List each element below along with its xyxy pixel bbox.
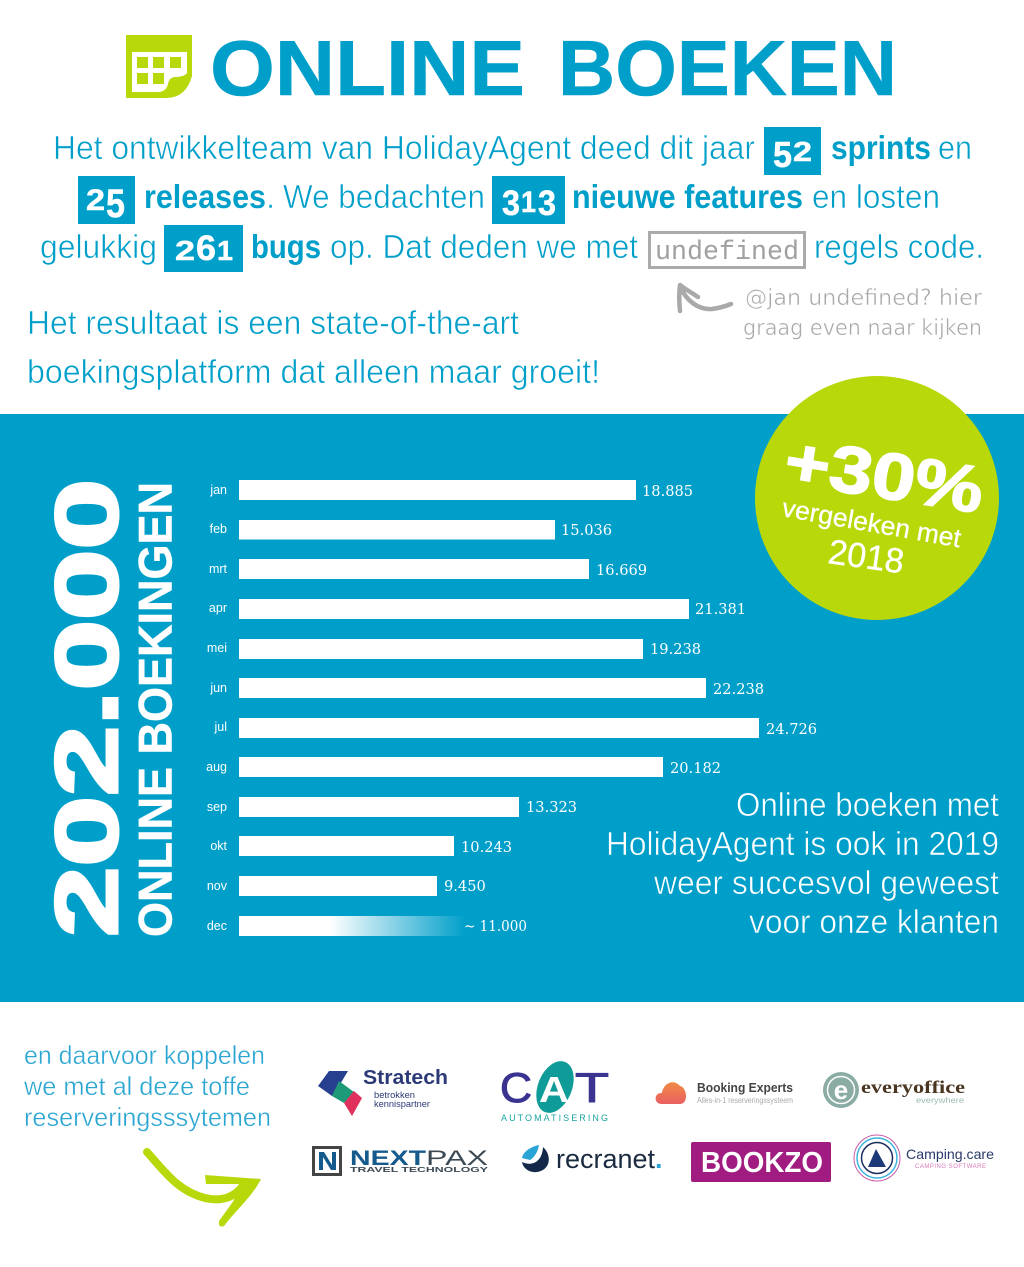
paragraph text line 2: We bedachten [283, 178, 485, 215]
month apr: 21.381 [695, 601, 746, 618]
logo: CAT Automatisering [500, 1056, 609, 1123]
paragraph text line 3: gelukkig [40, 228, 157, 265]
heading [210, 24, 897, 112]
heading: BOEKEN [558, 24, 897, 112]
logo: NextPax: TRAVEL TECHNOLOGY [350, 1167, 489, 1174]
month dec [207, 916, 527, 936]
logo: Bookzo: BOOKZO [701, 1147, 823, 1179]
stat box: 313 features [492, 176, 565, 224]
stat box: 52 sprints: 2 [793, 136, 812, 167]
month okt: okt [210, 839, 228, 853]
stat box: 261 bugs: 6 [196, 229, 216, 268]
paragraph text line 3: op. Dat deden we met [330, 228, 638, 265]
icon: green arrow to logos [147, 1152, 261, 1226]
result statement: Het resultaat is een state-of-the-art [27, 304, 519, 341]
month apr [209, 599, 746, 619]
result statement [27, 304, 600, 390]
paragraph text line 1: Het ontwikkelteam van HolidayAgent deed dit jaar [53, 129, 755, 166]
stat box: 52 sprints [764, 127, 821, 175]
text block: connections [23, 1040, 271, 1132]
logo: NextPax: PAX [426, 1147, 488, 1170]
stat box: 261 bugs: 1 [217, 235, 233, 266]
stat box: 25 releases: 2 [86, 184, 105, 217]
bar chart [206, 480, 817, 936]
text block: success statement: HolidayAgent is ook in 2019 [606, 825, 999, 862]
logo: everyoffice: everywhere [916, 1096, 965, 1105]
paragraph text line 3: regels code. [814, 228, 984, 265]
callout: growth badge: +30% [780, 423, 989, 527]
month jan: jan [209, 483, 227, 497]
note text line 2: graag even naar kijken [743, 316, 982, 341]
logo: everyoffice: e [834, 1075, 848, 1105]
month aug [206, 757, 721, 777]
total bookings vertical heading: 202.000 [37, 479, 136, 937]
heading: ONLINE [210, 24, 525, 112]
callout: growth badge: 2018 [826, 532, 907, 581]
paragraph text line 1: en [938, 129, 972, 166]
title block [126, 24, 897, 112]
text block: success statement: weer succesvol geweest [653, 864, 999, 901]
text block: success statement: Online boeken met [736, 786, 999, 823]
logo: everyoffice [823, 1072, 965, 1108]
logo: Stratech: Stratech [363, 1067, 448, 1089]
month sep: sep [207, 800, 227, 814]
logo: Camping.care: CAMPING SOFTWARE [915, 1164, 986, 1170]
month sep [207, 797, 577, 817]
stat box: 261 bugs: 2 [175, 235, 195, 266]
paragraph text line 2: . [266, 178, 275, 215]
month mrt [209, 559, 647, 579]
month jan: 18.885 [642, 483, 693, 500]
logo: Booking Experts: Booking Experts [697, 1080, 793, 1095]
text block: connections: reserveringsssytemen [24, 1102, 271, 1132]
month sep: 13.323 [526, 799, 577, 816]
month jul [213, 718, 817, 738]
text block: success statement: voor onze klanten [749, 903, 999, 940]
icon: calendar [126, 35, 192, 98]
paragraph text line 1: sprints [831, 129, 931, 166]
logo: CAT Automatisering: T [575, 1064, 609, 1111]
callout: growth badge: vergeleken met [780, 492, 964, 553]
logo: Camping.care: Camping.care [906, 1146, 994, 1162]
callout: growth badge [755, 376, 999, 620]
paragraph text line 2: nieuwe features [572, 178, 803, 215]
paragraph text line 3 [40, 228, 984, 265]
month apr: apr [209, 601, 227, 615]
stat box: 25 releases [78, 176, 135, 226]
logo: CAT Automatisering: A [539, 1069, 569, 1110]
total bookings vertical heading: ONLINE BOEKINGEN [128, 482, 182, 937]
stat box: 261 bugs [164, 225, 243, 272]
month dec: ~ 11.000 [464, 918, 527, 935]
logo: Stratech: kennispartner [374, 1099, 430, 1109]
month jan [209, 480, 693, 500]
month jul: 24.726 [766, 721, 817, 738]
stat box: 25 releases: 5 [106, 182, 125, 226]
result statement: boekingsplatform dat alleen maar groeit! [27, 353, 600, 390]
month aug: 20.182 [670, 760, 721, 777]
logo: Booking Experts: Alles-in-1 reserveringssysteem [697, 1096, 793, 1105]
icon: arrow to undefined [679, 285, 731, 311]
text block: success statement [606, 786, 999, 940]
month mei: mei [207, 641, 227, 655]
logo: CAT Automatisering: C [500, 1064, 532, 1111]
month jun [209, 678, 764, 698]
undefined code box: undefined [655, 238, 799, 268]
month nov: 9.450 [444, 878, 486, 895]
logo: Camping.care [854, 1135, 994, 1181]
text block: connections: en daarvoor koppelen [24, 1040, 265, 1070]
logo: everyoffice: everyoffice [861, 1077, 965, 1097]
month mrt: 16.669 [596, 562, 647, 579]
logo: Booking Experts [656, 1080, 793, 1105]
logo: CAT Automatisering: AUTOMATISERING [501, 1113, 608, 1123]
month okt [210, 836, 512, 856]
stat box: 313 features: 3 [538, 184, 556, 223]
month okt: 10.243 [461, 839, 512, 856]
month jun: 22.238 [713, 681, 764, 698]
month mrt: mrt [209, 562, 228, 576]
stat box: 313 features: 3 [502, 184, 520, 223]
month feb: 15.036 [561, 522, 612, 539]
paragraph text line 3: bugs [251, 228, 321, 265]
handwritten note [679, 285, 983, 341]
panel: bookings [0, 414, 1024, 1002]
month mei [207, 639, 701, 659]
logo: NextPax [314, 1147, 489, 1174]
logo: NextPax: NEXT [350, 1147, 426, 1170]
month nov: nov [207, 879, 228, 893]
month feb: feb [210, 522, 227, 536]
paragraph text line 2 [144, 178, 940, 215]
logo: Stratech [318, 1067, 448, 1116]
stat box: 52 sprints: 5 [773, 134, 792, 175]
month jun: jun [209, 681, 227, 695]
month dec: dec [207, 919, 227, 933]
paragraph text line 2: en losten [812, 178, 940, 215]
intro paragraph [40, 127, 984, 272]
note text: @jan undefined? hier [745, 286, 983, 311]
month feb [210, 520, 612, 540]
month mei: 19.238 [650, 641, 701, 658]
month aug: aug [206, 760, 227, 774]
paragraph text line 2: releases [144, 178, 266, 215]
logo: Stratech: betrokken [374, 1090, 415, 1100]
stat box: 313 features: 1 [521, 186, 536, 219]
total bookings vertical heading [37, 479, 182, 937]
month nov [207, 876, 486, 896]
text block: connections: we met al deze toffe [23, 1071, 250, 1101]
logo: recranet: recranet [556, 1144, 655, 1174]
month jul: jul [213, 720, 227, 734]
logo: recranet: . [655, 1144, 663, 1174]
